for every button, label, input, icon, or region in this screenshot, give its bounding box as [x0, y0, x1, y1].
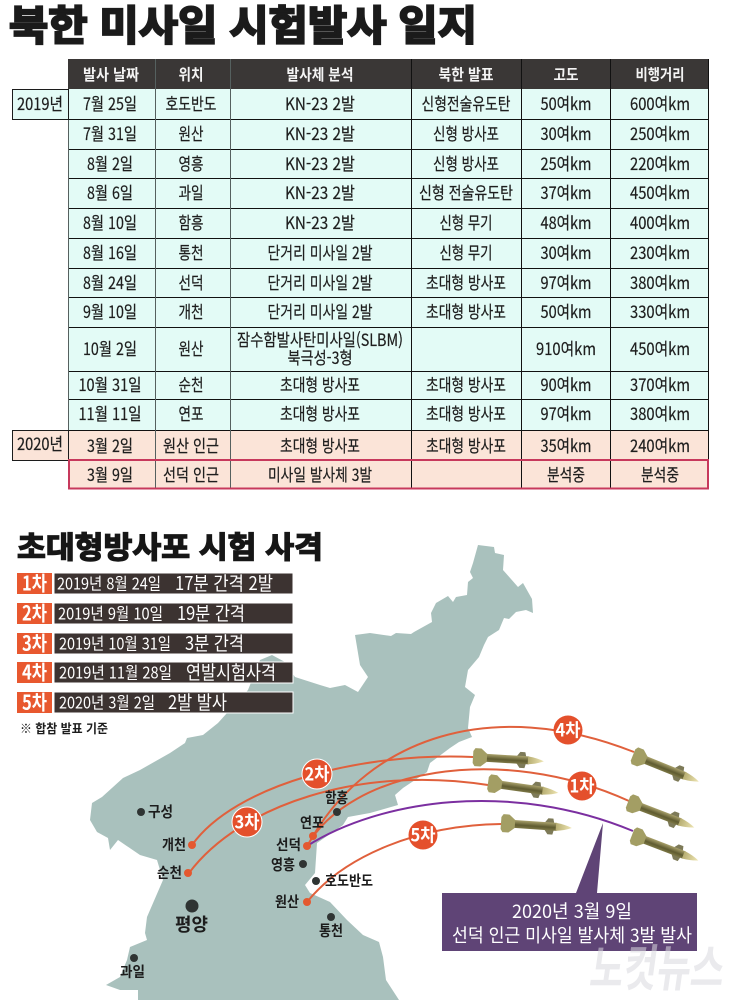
row 10월 31일: 10월 31일: [78, 371, 142, 396]
launch log table: [12, 59, 709, 489]
row 10월 2일: 10월 2일: [83, 335, 137, 360]
row 9월 10일: 초대형 방사포: [426, 298, 506, 323]
test 5: 2020년 3월 2일: [59, 690, 155, 714]
row 8월 10일: 8월 10일: [83, 209, 137, 234]
place: 통천: 통천: [319, 920, 343, 941]
test 3: [17, 628, 293, 656]
row 10월 31일: 370여km: [630, 371, 690, 396]
table header: 북한 발표: [438, 63, 494, 85]
row 3월 9일 highlighted: 분석중: [547, 461, 585, 486]
row 3월 2일: 원산 인근: [163, 432, 219, 457]
row 8월 2일: 25여km: [540, 150, 592, 175]
row 8월 16일: 단거리 미사일 2발: [268, 239, 373, 264]
test 1: 1차: [22, 568, 47, 596]
row 9월 10일: 330여km: [630, 298, 690, 323]
row 8월 24일: [83, 269, 690, 294]
place: 선덕: 선덕: [276, 834, 301, 855]
row 8월 6일: 과일: [178, 179, 204, 204]
row backgrounds: [68, 89, 709, 489]
missile: test 3: [487, 774, 560, 802]
row 3월 2일: 240여km: [630, 432, 690, 457]
row 8월 10일: 함흥: [178, 209, 204, 234]
row 8월 2일: 영흥: [178, 150, 204, 175]
missile: test 1: [625, 794, 698, 836]
row 7월 25일: 호도반도: [166, 90, 216, 115]
place: 평양: [175, 900, 208, 937]
row 7월 25일: [83, 90, 690, 115]
year tag 2019: 2019년: [17, 90, 63, 115]
year tag 2020: 2020년: [17, 430, 63, 455]
test 1: 2019년 8월 24일: [57, 570, 161, 594]
row 8월 24일: 380여km: [630, 269, 690, 294]
row 8월 16일: 통천: [178, 239, 204, 264]
place: 구성: 구성: [148, 801, 173, 822]
test 5: [17, 686, 293, 716]
row 10월 31일: [78, 371, 690, 396]
row 8월 6일: 450여km: [630, 179, 690, 204]
row 8월 10일: KN-23 2발: [285, 209, 355, 234]
row 11월 11일: 380여km: [630, 400, 690, 425]
test 2: 19분 간격: [177, 599, 245, 626]
row 10월 2일: 북극성-3형: [288, 344, 352, 369]
test 4: [17, 656, 293, 686]
missile: test 4: [630, 747, 702, 790]
test 2: [17, 598, 293, 626]
row 10월 2일: 잠수함발사탄미사일(SLBM): [237, 326, 403, 351]
badge: 3차: 3차: [234, 808, 260, 834]
row 7월 31일: 원산: [178, 120, 204, 145]
callout: March 9 launch: [442, 823, 697, 951]
row 10월 2일: 910여km: [536, 335, 596, 360]
row 8월 2일: 220여km: [630, 150, 690, 175]
place: 통천: [319, 913, 343, 941]
row 9월 10일: 단거리 미사일 2발: [268, 298, 373, 323]
row 7월 25일: 50여km: [540, 90, 592, 115]
place: 호도반도: 호도반도: [325, 870, 373, 891]
row 11월 11일: [78, 400, 690, 425]
test 4: 2019년 11월 28일: [59, 660, 172, 684]
test 1: [17, 568, 293, 596]
test 5: 5차: [22, 686, 47, 716]
row 8월 6일: [87, 179, 690, 204]
place: 개천: 개천: [162, 834, 186, 855]
place labels: [120, 787, 373, 982]
row 8월 16일: 230여km: [630, 239, 690, 264]
table header: 발사체 분석: [286, 63, 354, 85]
row 8월 16일: 8월 16일: [83, 239, 137, 264]
row 3월 2일: [87, 432, 690, 457]
badge: 1차: 1차: [570, 772, 595, 798]
test 3: 3차: [22, 628, 47, 656]
row 10월 31일: 초대형 방사포: [280, 371, 360, 396]
row 3월 2일: 초대형 방사포: [426, 432, 506, 457]
row 9월 10일: 50여km: [540, 298, 592, 323]
row 8월 24일: 8월 24일: [83, 269, 137, 294]
row 7월 31일: 30여km: [540, 120, 592, 145]
missile: test 5: [500, 814, 572, 837]
row 3월 2일: 초대형 방사포: [280, 432, 360, 457]
row 8월 16일: 신형 무기: [440, 239, 492, 264]
place: 함흥: [325, 787, 348, 816]
badge: 5차: 5차: [410, 822, 436, 848]
table header: 발사 날짜: [83, 63, 139, 85]
row 3월 9일 highlighted: 미사일 발사체 3발: [268, 461, 372, 486]
trajectories: [189, 727, 634, 902]
map of North Korea: [90, 545, 533, 1000]
row 8월 10일: 400여km: [630, 209, 690, 234]
row 3월 9일 highlighted: 선덕 인근: [163, 461, 219, 486]
row 7월 31일: [83, 120, 690, 145]
arc: test 3: [189, 780, 488, 873]
badge: 4차: 4차: [556, 716, 581, 742]
arc: test 2: [192, 757, 473, 845]
row 7월 25일: KN-23 2발: [285, 90, 355, 115]
table header: 고도: [554, 63, 578, 85]
row 7월 31일: 250여km: [630, 120, 690, 145]
table header: [68, 59, 709, 89]
test 5: 2발 발사: [168, 688, 227, 715]
row 8월 16일: 30여km: [540, 239, 592, 264]
row 11월 11일: 초대형 방사포: [280, 400, 360, 425]
test list: [17, 568, 293, 716]
table header: 위치: [178, 63, 204, 85]
row 11월 11일: 11월 11일: [78, 400, 142, 425]
row 8월 6일: 신형 전술유도탄: [419, 179, 513, 204]
row 11월 11일: 연포: [178, 400, 204, 425]
row 8월 2일: 신형 방사포: [433, 150, 499, 175]
place: 순천: 순천: [157, 862, 182, 883]
row 3월 2일: 3월 2일: [87, 432, 133, 457]
row 7월 31일: 7월 31일: [83, 120, 137, 145]
place: 구성: [137, 801, 173, 822]
row 8월 2일: KN-23 2발: [285, 150, 355, 175]
row 8월 6일: KN-23 2발: [285, 179, 355, 204]
arc: test 4: [313, 727, 634, 836]
row 10월 31일: 초대형 방사포: [426, 371, 506, 396]
test 1: 17분 간격 2발: [175, 569, 273, 596]
place: 연포: 연포: [300, 812, 324, 833]
row 3월 9일 highlighted: 분석중: [641, 461, 679, 486]
arc: March 9 launch: [307, 801, 633, 846]
place: 함흥: 함흥: [325, 787, 348, 808]
row 8월 10일: 48여km: [540, 209, 592, 234]
row 7월 25일: 신형전술유도탄: [422, 90, 511, 115]
row 10월 2일: 원산: [178, 335, 204, 360]
row 10월 31일: 순천: [178, 371, 204, 396]
row 3월 9일 highlighted: [69, 460, 708, 488]
test 4: 4차: [22, 656, 47, 686]
row 8월 24일: 단거리 미사일 2발: [268, 269, 373, 294]
test 2: 2차: [22, 598, 47, 626]
badge: 2차: 2차: [304, 760, 330, 786]
row 10월 31일: 90여km: [540, 371, 592, 396]
row 8월 24일: 초대형 방사포: [426, 269, 506, 294]
place: 원산: 원산: [275, 891, 299, 912]
test 4: 연발시험사격: [186, 658, 276, 685]
row 8월 2일: [87, 150, 690, 175]
row 10월 2일: 450여km: [630, 335, 690, 360]
row 7월 31일: KN-23 2발: [285, 120, 355, 145]
arc: test 1: [307, 769, 629, 846]
table grid: [68, 59, 709, 489]
row 8월 6일: 37여km: [540, 179, 592, 204]
row 3월 2일: 35여km: [540, 432, 592, 457]
place: 연포: [300, 812, 324, 840]
row 9월 10일: [83, 298, 690, 323]
source note: ※ 합참 발표 기준: [20, 718, 108, 737]
place: 과일: 과일: [120, 961, 145, 982]
place: 평양: 평양: [175, 911, 208, 937]
row 3월 9일 highlighted: 3월 9일: [87, 461, 133, 486]
missile: test 2: [472, 748, 544, 770]
row 8월 10일: [83, 209, 690, 234]
row 11월 11일: 초대형 방사포: [426, 400, 506, 425]
row 8월 24일: 97여km: [540, 269, 592, 294]
arc: test 5: [307, 824, 501, 902]
test 2: 2019년 9월 10일: [58, 600, 163, 624]
callout: March 9 launch: 2020년 3월 9일: [512, 898, 632, 924]
callout: March 9 launch: 선덕 인근 미사일 발사체 3발 발사: [452, 922, 692, 948]
heading: large rocket launcher tests: 초대형방사포 시험 사격: [17, 523, 323, 567]
row 9월 10일: 개천: [178, 298, 204, 323]
row 11월 11일: 97여km: [540, 400, 592, 425]
test 3: 3분 간격: [185, 629, 244, 656]
missile: March 9: [629, 827, 702, 869]
row 8월 10일: 신형 무기: [440, 209, 492, 234]
test 3: 2019년 10월 31일: [59, 630, 171, 654]
row 10월 2일: [83, 326, 690, 369]
row 8월 16일: [83, 239, 690, 264]
place: 영흥: 영흥: [271, 854, 295, 875]
row 9월 10일: 9월 10일: [83, 298, 137, 323]
row 7월 31일: 신형 방사포: [433, 120, 499, 145]
row 8월 2일: 8월 2일: [87, 150, 133, 175]
row 8월 24일: 선덕: [178, 269, 204, 294]
row 7월 25일: 7월 25일: [83, 90, 137, 115]
row 8월 6일: 8월 6일: [87, 179, 133, 204]
table header: 비행거리: [636, 63, 684, 85]
row 7월 25일: 600여km: [630, 90, 690, 115]
